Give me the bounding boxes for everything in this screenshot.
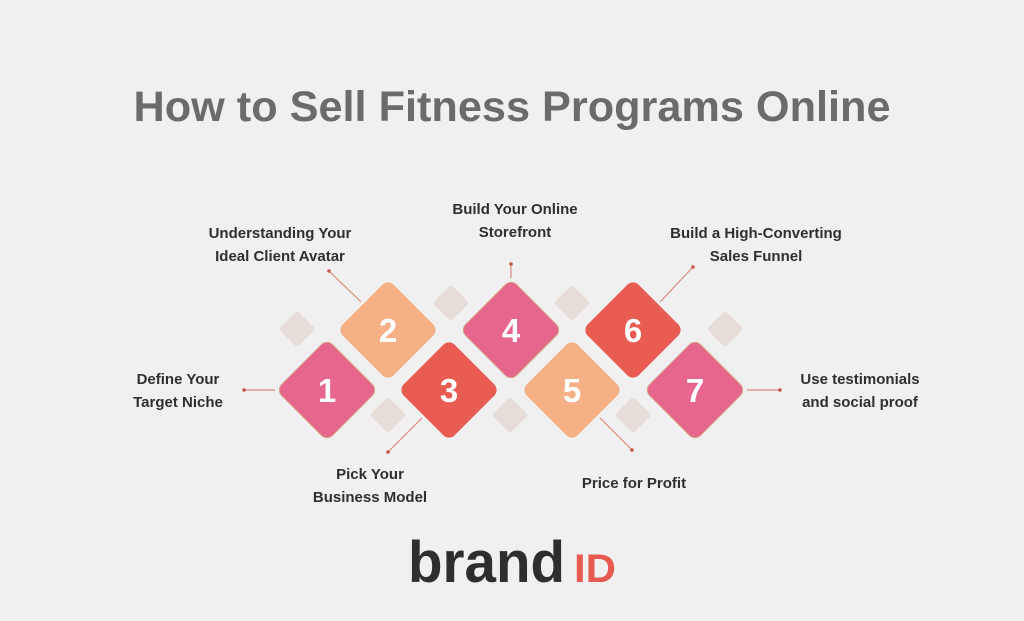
- logo: ID: [574, 547, 616, 591]
- label 7: Use testimonials: [800, 371, 920, 388]
- diamond 3: 3: [440, 372, 458, 409]
- diamond 3: [398, 339, 500, 441]
- label 4: Build Your Online: [452, 201, 578, 218]
- label 5: Price for Profit: [582, 475, 686, 492]
- decorative grey diamonds: [279, 285, 743, 433]
- label 4: Storefront: [479, 224, 551, 241]
- title: How to Sell Fitness Programs Online: [134, 83, 891, 131]
- diamond 4: [460, 279, 562, 381]
- diamond 4: 4: [502, 312, 521, 349]
- label 1: Define Your: [137, 371, 219, 388]
- diamond 5: 5: [563, 372, 581, 409]
- labels: [133, 201, 920, 506]
- diamond 1: 1: [318, 372, 336, 409]
- label 1: Target Niche: [133, 394, 223, 411]
- diamond 7: 7: [686, 372, 704, 409]
- connectors: [242, 262, 782, 454]
- diamond 1: [276, 339, 378, 441]
- logo: brand: [408, 530, 565, 595]
- label 3: Pick Your: [336, 466, 404, 483]
- label 7: and social proof: [802, 394, 919, 411]
- diamond 2: 2: [379, 312, 397, 349]
- diamond 6: 6: [624, 312, 642, 349]
- label 6: Build a High-Converting: [670, 225, 842, 242]
- diamond 5: [521, 339, 623, 441]
- label 3: Business Model: [313, 489, 427, 506]
- diamond 7: [644, 339, 746, 441]
- label 2: Ideal Client Avatar: [215, 248, 345, 265]
- diamond 6: [582, 279, 684, 381]
- label 6: Sales Funnel: [710, 248, 802, 265]
- diamond 2: [337, 279, 439, 381]
- label 2: Understanding Your: [209, 225, 351, 242]
